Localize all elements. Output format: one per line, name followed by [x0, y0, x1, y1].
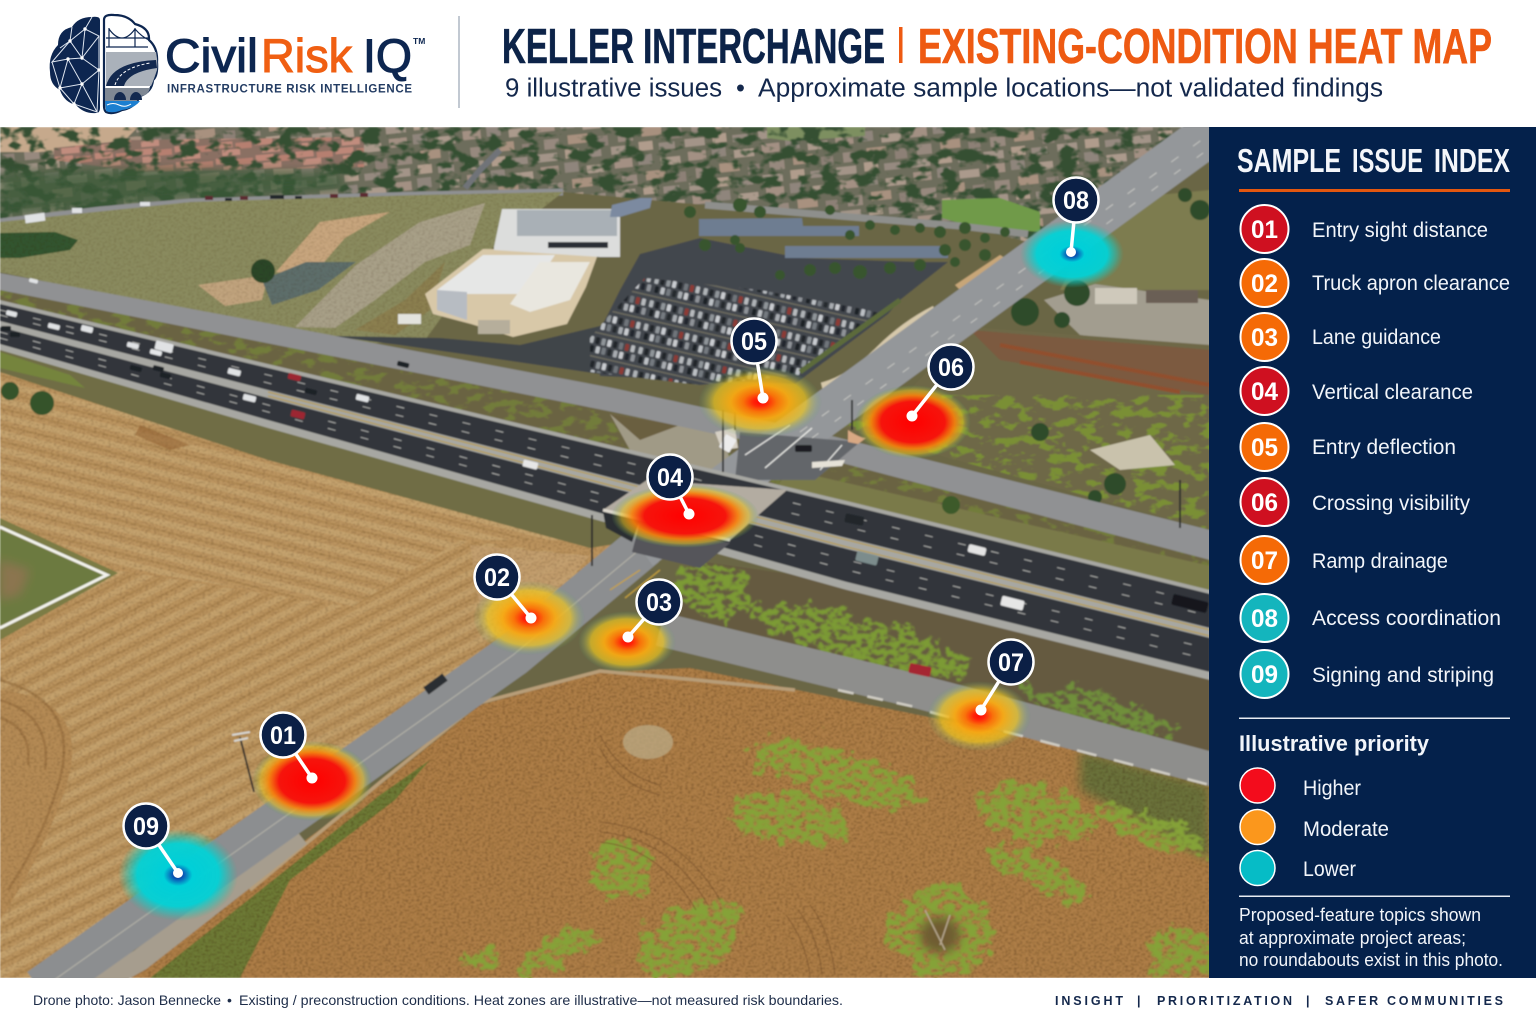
pin 07 [976, 640, 1034, 716]
issue 09 [1240, 650, 1494, 698]
pin 03: 03 [646, 589, 672, 617]
heat zone 05 [698, 366, 822, 438]
legend moderate: Moderate [1303, 818, 1389, 841]
legend higher [1240, 768, 1361, 803]
icon: brain with infrastructure [50, 15, 157, 113]
pin 06: 06 [938, 354, 964, 382]
aerial drone photo [0, 127, 1225, 999]
heat zone 09 [118, 829, 238, 921]
map pins [124, 178, 1098, 878]
heat zone 03 [578, 611, 676, 673]
pin 09 [124, 804, 183, 878]
pin 08 [1054, 178, 1098, 257]
panel note: at approximate project areas; [1239, 927, 1466, 948]
heat zone 08 [1020, 220, 1124, 288]
issue 05 [1240, 423, 1456, 471]
wordmark: IQ [363, 29, 412, 82]
header band [0, 0, 1536, 127]
footer credit: Drone photo: Jason Bennecke [33, 992, 221, 1008]
south frontage road [660, 629, 1215, 785]
footer band [0, 978, 1536, 1024]
legend: illustrative priority [1239, 731, 1430, 886]
wordmark [165, 29, 412, 82]
issue 06: Crossing visibility [1312, 491, 1470, 515]
heat zone 02 [473, 581, 585, 655]
east scrub and dirt fields [840, 188, 1210, 532]
title: KELLER INTERCHANGE [502, 20, 885, 74]
paddock with white fence [0, 518, 118, 640]
divider [1239, 896, 1510, 897]
scrub strip north of highway [0, 285, 1210, 595]
issue 03: 03 [1251, 324, 1278, 352]
panel heading: SAMPLE [1237, 142, 1341, 179]
tagline: INFRASTRUCTURE RISK INTELLIGENCE [167, 84, 412, 96]
heat zone 04 [611, 484, 759, 548]
trademark: TM [413, 36, 425, 46]
parking lots and carports [330, 198, 1012, 387]
issue 02 [1240, 259, 1510, 307]
vehicles [1, 193, 1209, 677]
local road along north side of highway [0, 273, 1210, 560]
title [502, 20, 1492, 74]
hay field west [0, 370, 640, 980]
legend heading: Illustrative priority [1239, 731, 1430, 756]
issue 05: Entry deflection [1312, 435, 1456, 459]
subtitle: 9 illustrative issues [505, 74, 722, 102]
highway corridor [0, 300, 1210, 680]
panel note: no roundabouts exist in this photo. [1239, 949, 1503, 970]
scrub strip south of highway [0, 350, 1210, 765]
pin 07: 07 [998, 649, 1024, 677]
issue 04: Vertical clearance [1312, 380, 1473, 404]
subtitle: Approximate sample locations—not validated findings [758, 74, 1383, 102]
issue 04: 04 [1251, 378, 1278, 406]
pin 01: 01 [270, 722, 296, 750]
main diagonal road: south segment [40, 545, 645, 990]
panel heading [1237, 142, 1510, 179]
pin 02: 02 [484, 564, 510, 592]
divider [1239, 718, 1510, 719]
footer tagline: | [1306, 994, 1310, 1008]
logo: CivilRisk IQ [50, 15, 425, 113]
issue 07: 07 [1251, 547, 1278, 575]
subtitle [505, 74, 1383, 102]
legend higher: Higher [1303, 777, 1361, 800]
subtitle: • [736, 74, 745, 102]
pin 04: 04 [657, 464, 683, 492]
pin 08: 08 [1063, 187, 1089, 215]
heading rule [1239, 189, 1510, 192]
issue 06 [1240, 478, 1470, 526]
legend lower [1240, 850, 1356, 886]
issue 07 [1240, 536, 1448, 584]
overpass bridge [603, 480, 787, 598]
legend moderate [1240, 810, 1389, 844]
panel heading: ISSUE [1352, 142, 1423, 179]
issue 06: 06 [1251, 489, 1278, 517]
panel: sample issue index [1209, 127, 1536, 978]
issue 07: Ramp drainage [1312, 549, 1448, 573]
pin 06 [906, 344, 974, 422]
pin 05: 05 [741, 328, 767, 356]
brown field southeast [120, 668, 1225, 999]
issue 08: 08 [1251, 605, 1278, 633]
heat zone 06 [855, 385, 971, 459]
legend lower: Lower [1303, 858, 1356, 881]
footer tagline: SAFER COMMUNITIES [1325, 994, 1503, 1008]
medical campus [398, 198, 652, 337]
footer tagline [1055, 994, 1503, 1008]
issue 03: Lane guidance [1312, 325, 1441, 349]
panel heading: INDEX [1434, 142, 1510, 179]
footer tagline: | [1137, 994, 1140, 1008]
heat zone 07 [927, 681, 1031, 751]
issue 09: Signing and striping [1312, 663, 1494, 687]
wordmark: Civil [165, 29, 258, 82]
footer tagline: PRIORITIZATION [1157, 994, 1292, 1008]
northwest field [0, 192, 570, 347]
panel note [1239, 904, 1503, 970]
residential neighborhood [0, 127, 1180, 242]
pin 04 [648, 454, 694, 520]
issue 05: 05 [1251, 434, 1278, 462]
heat zones [118, 220, 1124, 921]
wordmark: Risk [261, 29, 352, 82]
issue 08 [1240, 594, 1501, 642]
main diagonal road: north segment and intersection [640, 128, 1218, 548]
issue 09: 09 [1251, 661, 1278, 689]
issue 01: Entry sight distance [1312, 218, 1488, 242]
issue 02: 02 [1251, 270, 1278, 298]
footer credit: Existing / preconstruction conditions. Heat zones are illustrative—not measured risk boundaries. [239, 992, 843, 1008]
pin 03 [622, 580, 682, 642]
panel note: Proposed-feature topics shown [1239, 904, 1481, 925]
pin 01 [260, 712, 318, 784]
header divider [458, 16, 460, 108]
pin 09: 09 [133, 813, 159, 841]
pin 05 [732, 318, 776, 404]
issue 03 [1240, 313, 1441, 361]
footer credit: • [227, 992, 232, 1008]
issue 01 [1240, 205, 1488, 253]
issue 04 [1240, 367, 1473, 415]
issue 01: 01 [1251, 216, 1278, 244]
utility poles and signals [232, 400, 1180, 792]
road north of field [0, 192, 563, 222]
footer tagline: INSIGHT [1055, 994, 1123, 1008]
issue 02: Truck apron clearance [1312, 271, 1510, 295]
heat zone 01 [252, 741, 372, 821]
pin 02 [474, 554, 536, 624]
issue 08: Access coordination [1312, 606, 1501, 630]
